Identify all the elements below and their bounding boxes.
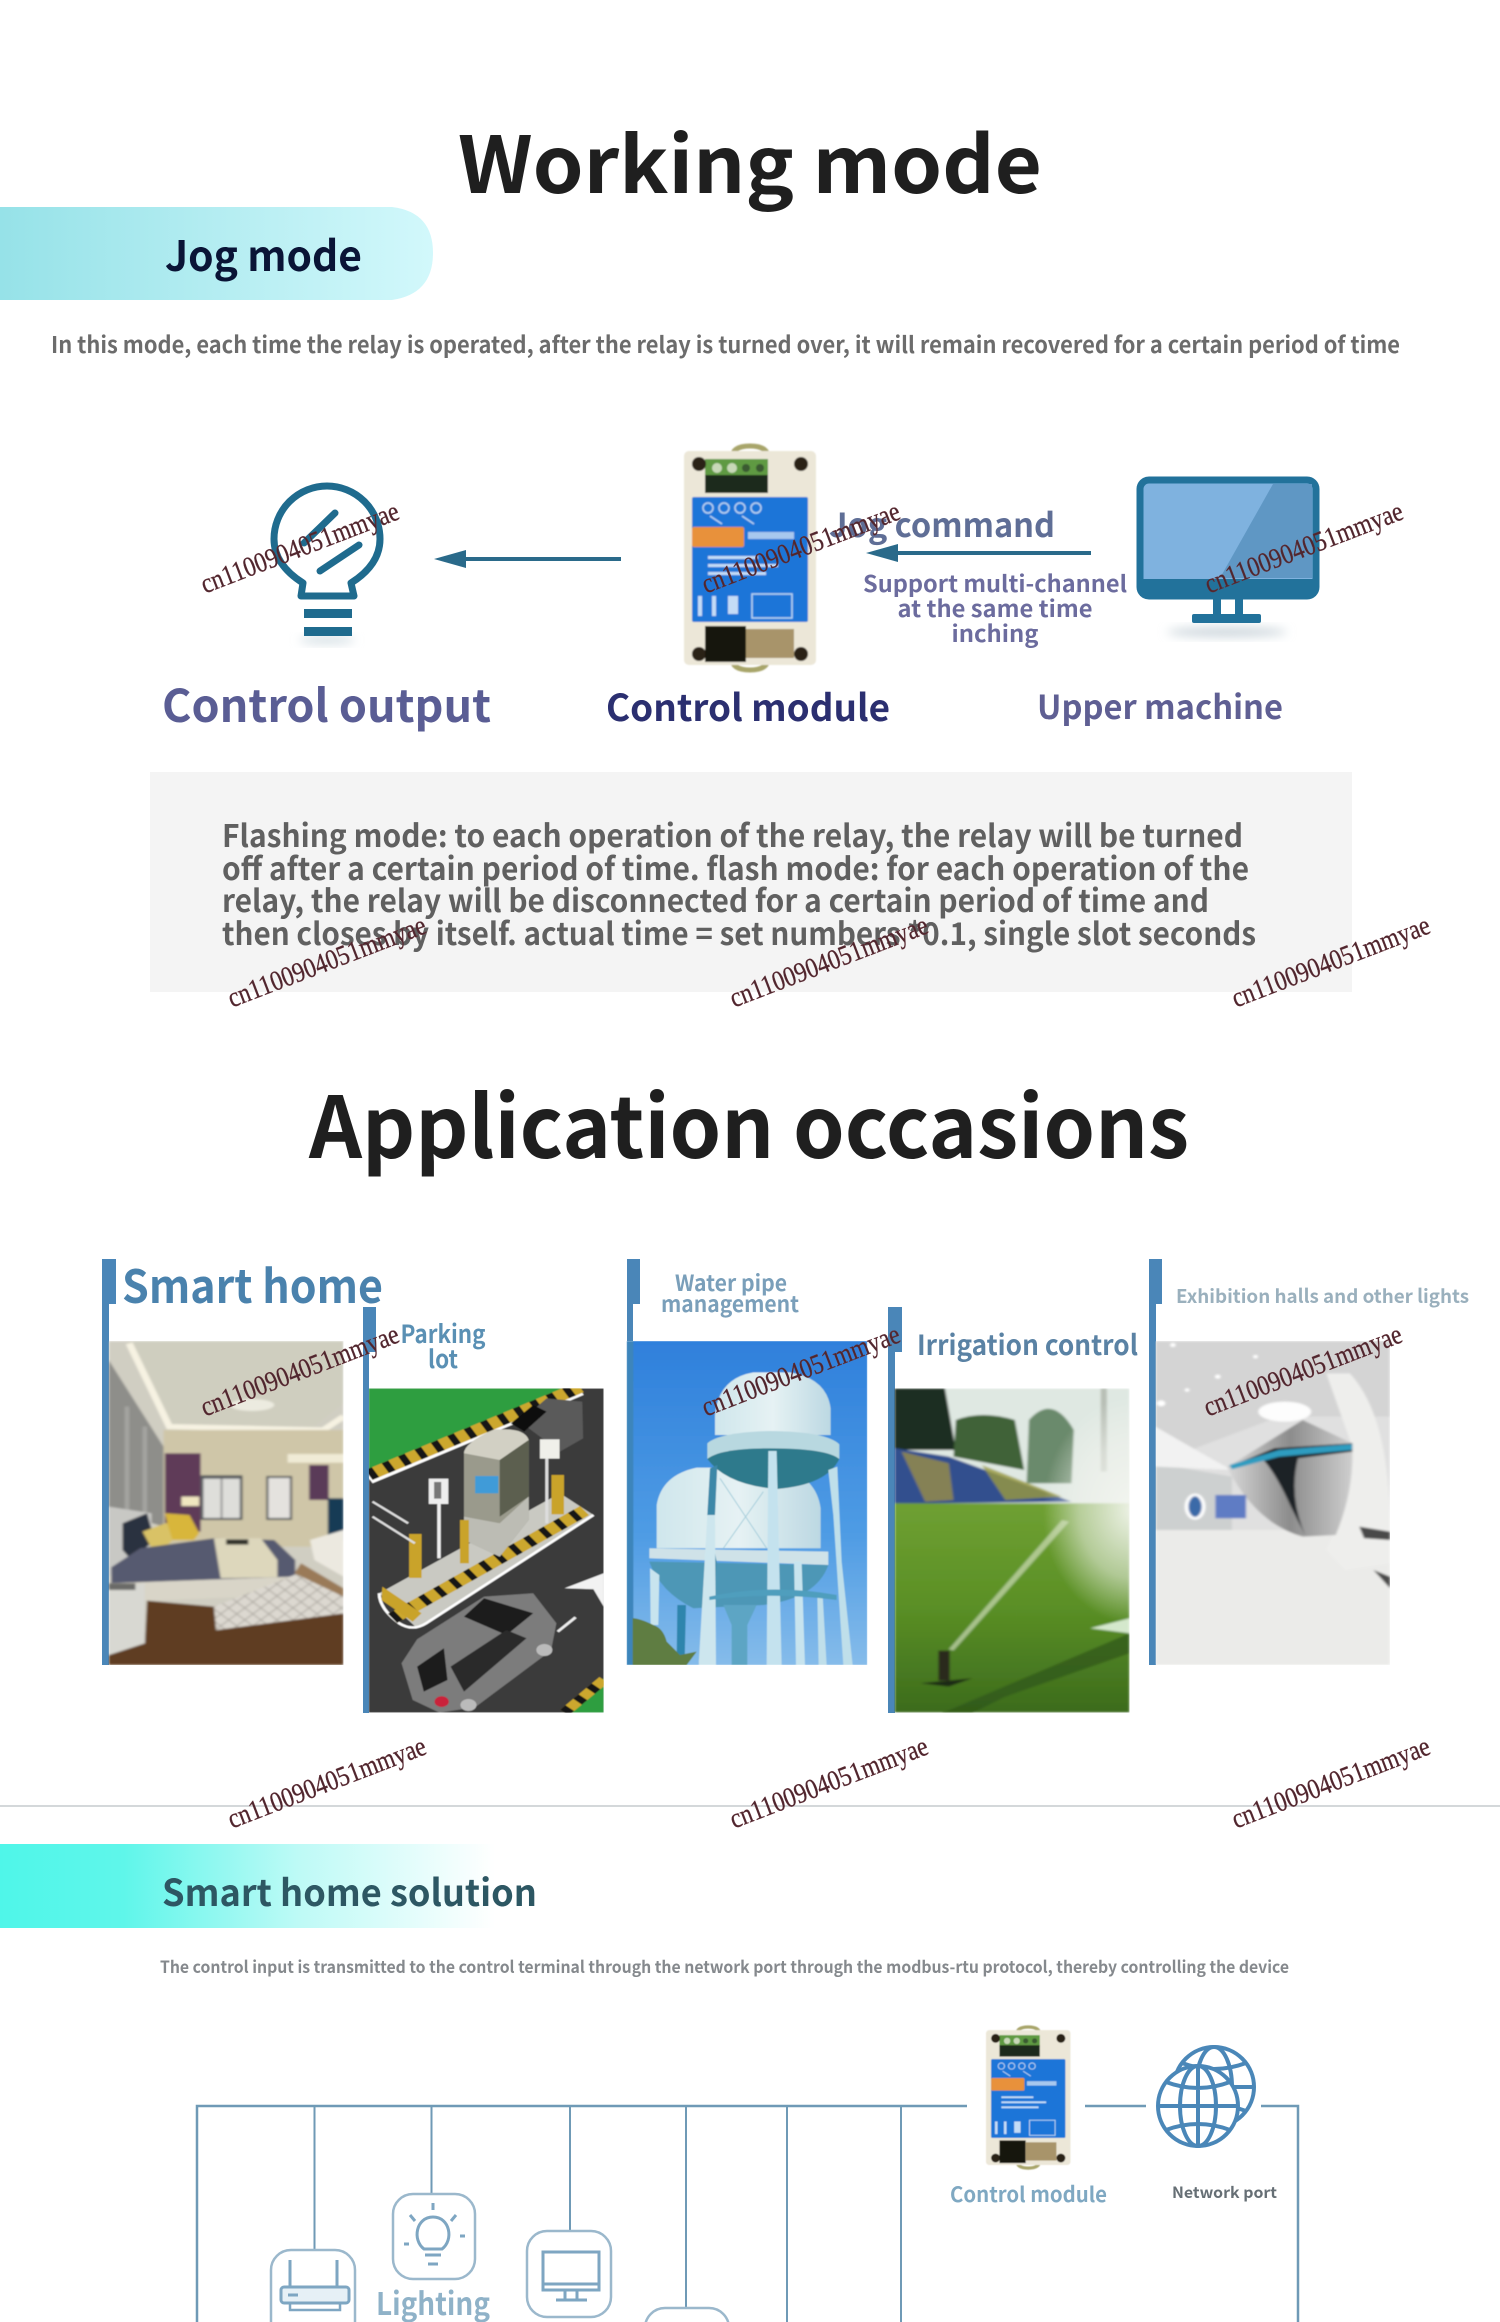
label: parking lot [400,1315,486,1376]
watermarks: cn1100904051mmyae [725,1731,933,1835]
icon: network globes [1158,2047,1254,2146]
watermarks: cn1100904051mmyae [196,496,404,600]
divider [0,1805,1500,1807]
watermarks [196,496,1435,1835]
label: water pipe management: management [661,1287,799,1319]
image: control module small [986,2027,1070,2168]
watermarks: cn1100904051mmyae [1227,910,1435,1014]
label: control output: Control output [162,670,491,735]
icon: monitor upper machine [1140,480,1316,637]
panel: flashing mode note: relay, the relay will be disconnected for a certain period of time and [222,876,1209,921]
panel: flashing mode note: Flashing mode: to each operation of the relay, the relay will be turned [222,811,1243,856]
watermarks: cn1100904051mmyae [223,910,431,1014]
heading pill: Jog mode [0,207,433,300]
image: control module [684,446,816,670]
icon: monitor box [527,2231,611,2317]
icon: lighting box [393,2194,475,2279]
label: network port: Network port [1172,2181,1277,2203]
card: irrigation control: Irrigation control [917,1324,1138,1364]
icon: router box [271,2250,355,2322]
card: smart home [102,1251,383,1665]
title: Working mode: Working mode [458,104,1042,216]
label: water pipe management [661,1266,799,1319]
panel: flashing mode note: then closes by itself. actual time = set numbers *0.1, single slot seconds [222,909,1256,954]
description: smart home solution: The control input is transmitted to the control terminal through the network port through the modbus-rtu protocol, thereby controlling the device [160,1954,1289,1978]
image: water tower [627,1341,867,1665]
label: parking lot: Parking [400,1315,486,1351]
label: water pipe management: Water pipe [675,1266,787,1298]
heading band: Smart home solution: Smart home solution [162,1863,537,1917]
label: control module small: Control module [950,2179,1107,2209]
arrow: upper machine to module [866,544,1091,562]
label: support multi-channel: inching [952,615,1039,649]
label: jog command: Jog command [829,499,1055,547]
image: sprinkler on lawn [894,1388,1130,1713]
heading band: Smart home solution [0,1844,537,1928]
label: parking lot: lot [428,1340,458,1376]
card: exhibition halls [1149,1259,1469,1665]
panel: flashing mode note: off after a certain period of time. flash mode: for each operation of the [222,844,1249,889]
icon: fourth device box [645,2308,729,2322]
watermarks: cn1100904051mmyae [1227,1731,1435,1835]
watermarks: cn1100904051mmyae [725,910,933,1014]
card: smart home: Smart home [122,1251,383,1317]
card: exhibition halls: Exhibition halls and other lights [1176,1282,1469,1309]
description: jog mode: In this mode, each time the relay is operated, after the relay is turned over, it will remain recovered for a certain period of time [51,326,1400,360]
card: parking lot [363,1307,604,1713]
image: parking lot [369,1387,604,1713]
arrow: module to output [434,550,621,568]
watermarks: cn1100904051mmyae [697,1319,905,1423]
image: bedroom [109,1341,343,1665]
watermarks: cn1100904051mmyae [697,496,905,600]
watermarks: cn1100904051mmyae [1199,1319,1407,1423]
title: Application occasions: Application occasions [308,1060,1189,1183]
panel: flashing mode note [150,772,1352,992]
icon: light bulb control output [274,486,380,644]
label: upper machine: Upper machine [1037,681,1283,729]
wiring lines [197,2106,1298,2322]
card: irrigation control [888,1307,1138,1713]
image: exhibition hall [1155,1341,1390,1665]
watermarks: cn1100904051mmyae [196,1319,404,1423]
label: support multi-channel: Support multi-channel [863,565,1127,599]
watermarks: cn1100904051mmyae [1200,496,1408,600]
label: support multi-channel [863,565,1127,649]
heading pill: Jog mode: Jog mode [165,223,362,284]
watermarks: cn1100904051mmyae [223,1731,431,1835]
card: water pipe management [627,1259,867,1665]
label: support multi-channel: at the same time [898,590,1092,624]
label: control module: Control module [606,678,890,732]
